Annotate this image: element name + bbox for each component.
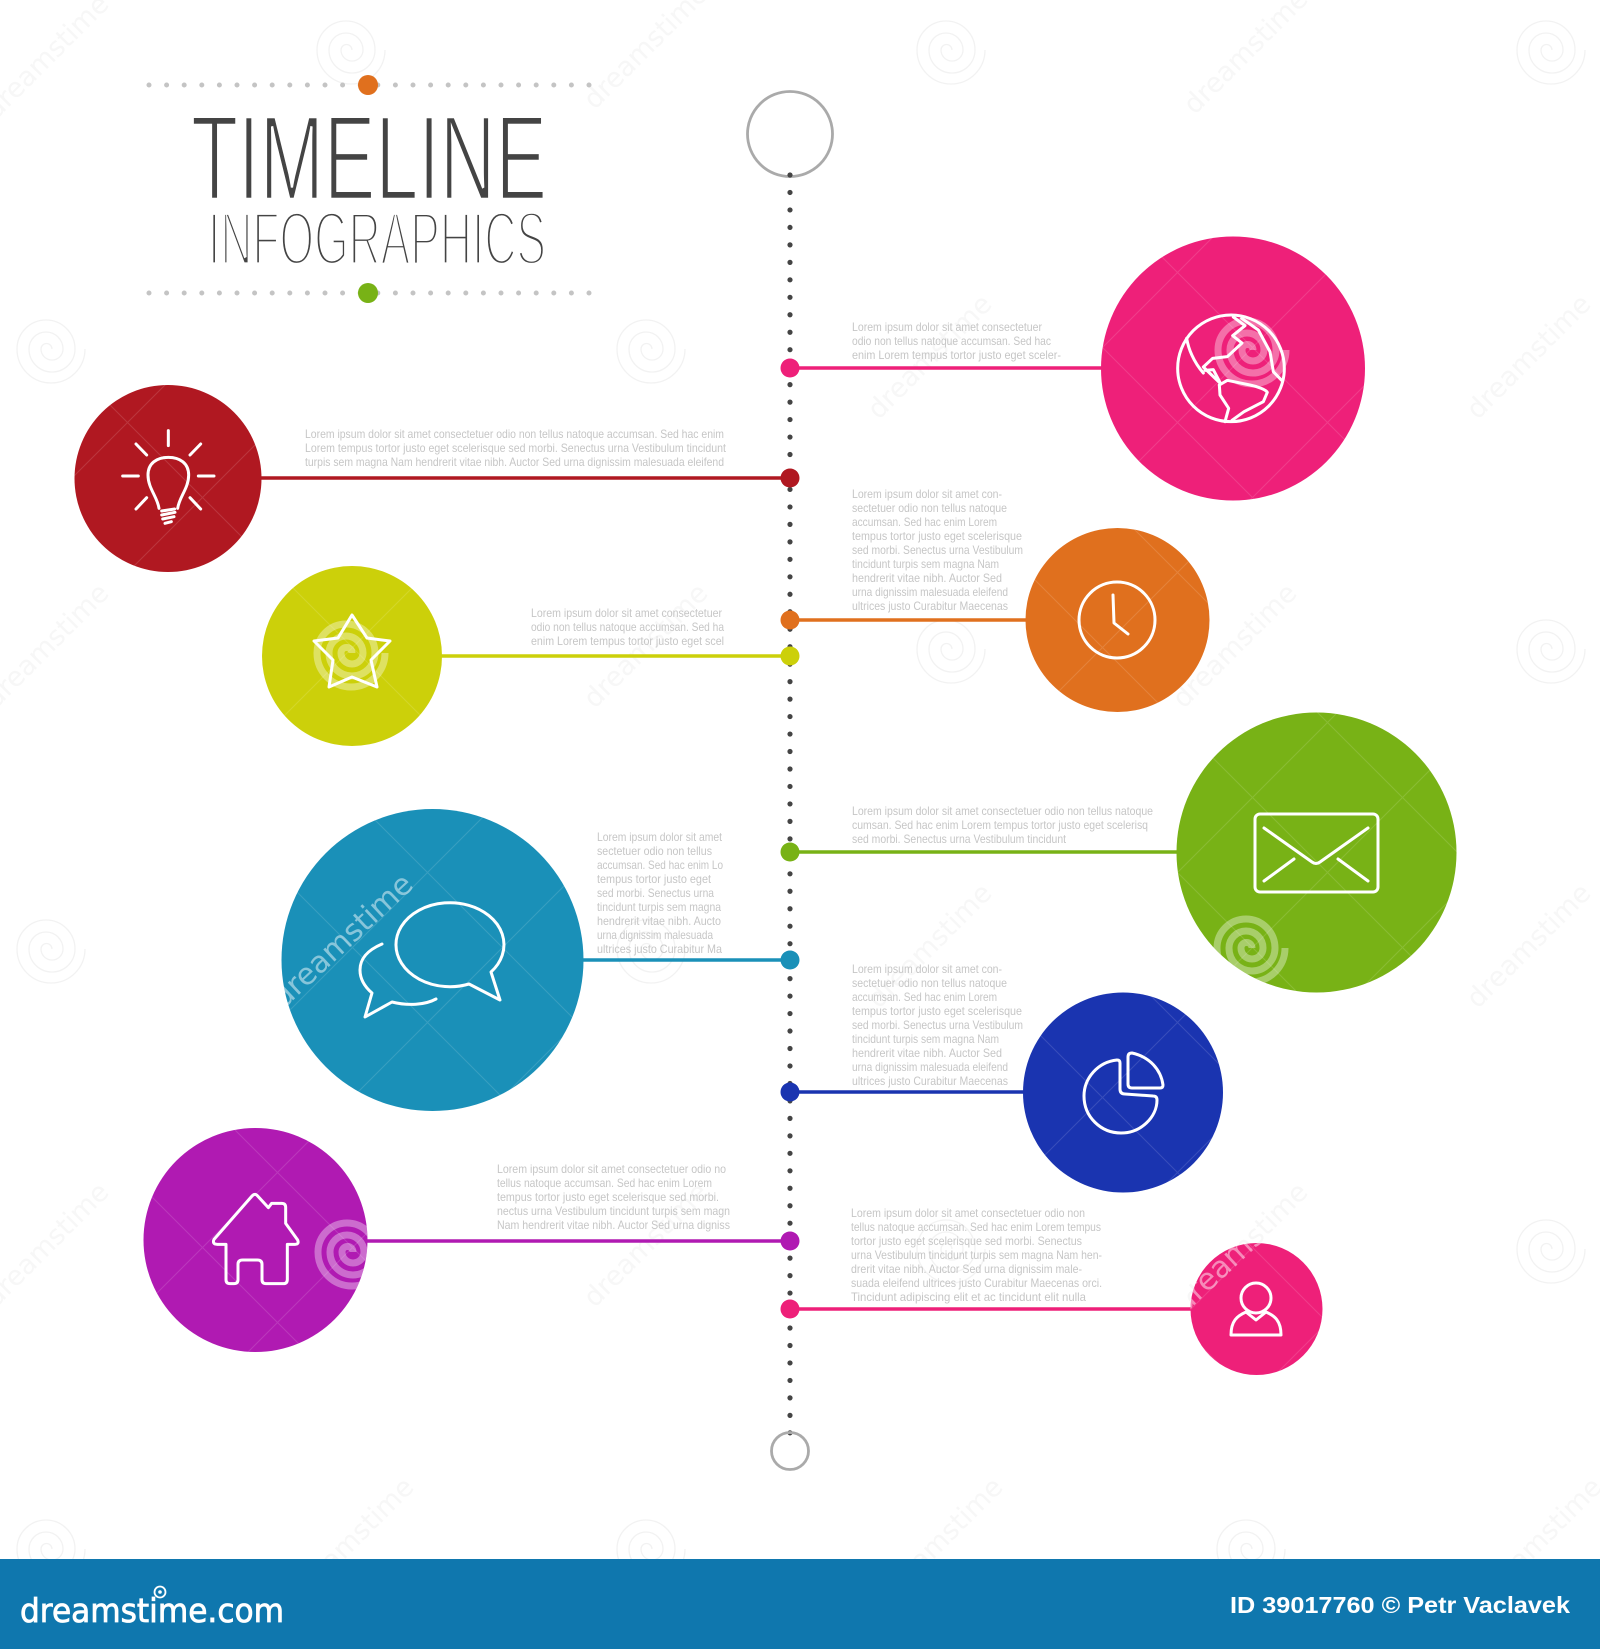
- icon: pie chart: [1084, 1053, 1163, 1133]
- text block: nectus urna Vestibulum tincidunt turpis sem magn: [497, 1204, 730, 1218]
- text block: [851, 1206, 1102, 1304]
- top ring: [748, 92, 832, 176]
- dotted axis: [787, 175, 793, 1434]
- icon: globe: [1178, 315, 1284, 422]
- text block: [852, 487, 1023, 613]
- timeline infographic: dreamstime: [1178, 1177, 1314, 1313]
- text block: Lorem ipsum dolor sit amet con-: [852, 962, 1002, 976]
- text block: accumsan. Sed hac enim Lorem: [852, 990, 997, 1004]
- icon: clock: [1079, 582, 1155, 658]
- green title dot: [358, 283, 378, 303]
- heading: timeline: TIMELINE: [191, 90, 547, 226]
- text block: Lorem ipsum dolor sit amet: [597, 830, 723, 844]
- connector: [430, 654, 790, 658]
- text block: urna dignissim malesuada eleifend: [852, 1060, 1008, 1074]
- text block: tortor justo eget scelerisque sed morbi. Senectus: [851, 1234, 1082, 1248]
- bottom ring: [772, 1432, 808, 1470]
- panel: mail event: [780, 712, 1456, 992]
- timeline infographic: dreamstime: [578, 1177, 714, 1313]
- timeline infographic: dreamstime: [862, 878, 998, 1014]
- text block: Lorem ipsum dolor sit amet consectetuer: [852, 320, 1042, 334]
- text block: Lorem tempus tortor justo eget scelerisque sed morbi. Senectus urna Vestibulum tincidunt: [305, 441, 727, 455]
- text block: Nam hendrerit vitae nibh. Auctor Sed urna digniss: [497, 1218, 730, 1232]
- text block: sed morbi. Senectus urna: [597, 886, 714, 900]
- panel: home event: [144, 1128, 800, 1352]
- node: [780, 950, 800, 970]
- icon: person: [1231, 1283, 1281, 1335]
- timeline infographic: dreamstime: [1461, 878, 1597, 1014]
- text block: urna dignissim malesuada: [597, 928, 713, 942]
- text block: sectetuer odio non tellus natoque: [852, 976, 1007, 990]
- text block: Tincidunt adipiscing elit et ac tincidunt elit nulla: [851, 1290, 1086, 1304]
- text block: odio non tellus natoque accumsan. Sed ha: [531, 620, 724, 634]
- node: [780, 610, 800, 630]
- text block: Lorem ipsum dolor sit amet consectetuer odio non: [851, 1206, 1085, 1220]
- top dotted rule: [149, 82, 589, 88]
- title block: [149, 75, 589, 303]
- panel: chart event: [780, 962, 1223, 1192]
- orange title dot: [358, 75, 378, 95]
- text block: sectetuer odio non tellus: [597, 844, 712, 858]
- timeline infographic: dreamstime: [284, 1472, 420, 1608]
- text block: enim Lorem tempus tortor justo eget sceler-: [852, 348, 1061, 362]
- text block: ultrices justo Curabitur Maecenas: [852, 1074, 1008, 1088]
- text block: tellus natoque accumsan. Sed hac enim Lorem tempus: [851, 1220, 1101, 1234]
- panel: chat event: [265, 809, 800, 1111]
- text block: Lorem ipsum dolor sit amet consectetuer odio non tellus natoque accumsan. Sed hac enim: [305, 427, 724, 441]
- text block: ultrices justo Curabitur Ma: [597, 942, 722, 956]
- connector: [790, 366, 1110, 370]
- icon: house: [213, 1194, 298, 1284]
- circle: [74, 385, 262, 572]
- text block: hendrerit vitae nibh. Auctor Sed: [852, 1046, 1002, 1060]
- connector: [250, 476, 790, 480]
- text block: Lorem ipsum dolor sit amet con-: [852, 487, 1002, 501]
- panel: star event: [262, 566, 790, 746]
- circle: [1023, 992, 1223, 1192]
- text block: hendrerit vitae nibh. Auctor Sed: [852, 571, 1002, 585]
- circle: [1101, 236, 1365, 500]
- text block: tempus tortor justo eget scelerisque: [852, 529, 1022, 543]
- text block: tempus tortor justo eget: [597, 872, 712, 886]
- panel: profile event: dreamstime: [1166, 1172, 1321, 1320]
- text block: [852, 962, 1023, 1088]
- text block: sed morbi. Senectus urna Vestibulum tincidunt: [852, 832, 1067, 846]
- node: [780, 1232, 800, 1250]
- icon: light bulb: [123, 431, 214, 523]
- text block: turpis sem magna Nam hendrerit vitae nibh. Auctor Sed urna dignissim malesuada eleifend: [305, 455, 724, 469]
- text block: Lorem ipsum dolor sit amet consectetuer odio no: [497, 1162, 726, 1176]
- connector: [355, 1239, 790, 1243]
- text block: Lorem ipsum dolor sit amet consectetuer: [531, 606, 722, 620]
- node: [780, 842, 800, 862]
- text block: tincidunt turpis sem magna Nam: [852, 1032, 999, 1046]
- text block: [497, 1162, 730, 1232]
- text block: urna dignissim malesuada eleifend: [852, 585, 1008, 599]
- connector: [790, 850, 1190, 854]
- text block: drerit vitae nibh. Auctor Sed urna dignissim male-: [851, 1262, 1082, 1276]
- panel: chat event: dreamstime: [265, 867, 420, 1015]
- node: [780, 1082, 800, 1102]
- text block: tempus tortor justo eget scelerisque sed morbi.: [497, 1190, 719, 1204]
- node: [780, 468, 800, 488]
- text block: [597, 830, 723, 956]
- footer bar: [0, 1559, 1600, 1649]
- image id and credit: ID 39017760 © Petr Vaclavek: [1230, 1592, 1570, 1618]
- text block: hendrerit vitae nibh. Aucto: [597, 914, 721, 928]
- timeline infographic: dreamstime: [1167, 578, 1303, 714]
- circle: [1190, 1243, 1322, 1375]
- panel: globe event: [780, 236, 1365, 500]
- node: star event: [780, 646, 800, 666]
- panel: clock event: [780, 487, 1210, 712]
- circle: [282, 809, 584, 1111]
- panel: idea event: [74, 385, 800, 572]
- text block: enim Lorem tempus tortor justo eget scel: [531, 634, 724, 648]
- bottom dotted rule: [149, 290, 589, 296]
- icon: chat bubbles: [360, 903, 504, 1017]
- text block: tincidunt turpis sem magna Nam: [852, 557, 999, 571]
- text block: Lorem ipsum dolor sit amet consectetuer odio non tellus natoque: [852, 804, 1153, 818]
- node: [780, 1300, 800, 1318]
- text block: sectetuer odio non tellus natoque: [852, 501, 1007, 515]
- text block: [305, 427, 727, 469]
- text block: ultrices justo Curabitur Maecenas: [852, 599, 1008, 613]
- timeline axis: [748, 92, 832, 1470]
- text block: accumsan. Sed hac enim Lorem: [852, 515, 997, 529]
- circle: [1176, 712, 1456, 992]
- node: [780, 358, 800, 378]
- text block: odio non tellus natoque accumsan. Sed hac: [852, 334, 1051, 348]
- text block: [852, 804, 1153, 846]
- text block: tincidunt turpis sem magna: [597, 900, 721, 914]
- connector: [790, 1307, 1200, 1311]
- text block: sed morbi. Senectus urna Vestibulum: [852, 1018, 1023, 1032]
- text block: accumsan. Sed hac enim Lo: [597, 858, 723, 872]
- connector: [790, 618, 1035, 622]
- text block: urna Vestibulum tincidunt turpis sem magna Nam hen-: [851, 1248, 1102, 1262]
- text block: cumsan. Sed hac enim Lorem tempus tortor justo eget scelerisq: [852, 818, 1148, 832]
- text block: suada eleifend ultrices justo Curabitur Maecenas orci.: [851, 1276, 1102, 1290]
- timeline infographic: dreamstime: [578, 578, 714, 714]
- text block: tellus natoque accumsan. Sed hac enim Lorem: [497, 1176, 712, 1190]
- timeline infographic: dreamstime: [862, 289, 998, 425]
- heading: infographics: INFOGRAPHICS: [208, 196, 546, 280]
- text block: tempus tortor justo eget scelerisque: [852, 1004, 1022, 1018]
- icon: star: [314, 615, 390, 687]
- connector: [570, 958, 790, 962]
- footer logo: dreamstime.com: [20, 1591, 284, 1630]
- circle: [262, 566, 442, 746]
- circle: [1026, 528, 1210, 712]
- timeline infographic: dreamstime: [1461, 289, 1597, 425]
- circle: [144, 1128, 368, 1352]
- text block: [852, 320, 1061, 362]
- timeline infographic: dreamstime: [873, 1472, 1009, 1608]
- icon: envelope: [1255, 814, 1378, 892]
- text block: sed morbi. Senectus urna Vestibulum: [852, 543, 1023, 557]
- panel: profile event: [780, 1208, 1322, 1375]
- connector: [790, 1090, 1030, 1094]
- text block: [531, 606, 724, 648]
